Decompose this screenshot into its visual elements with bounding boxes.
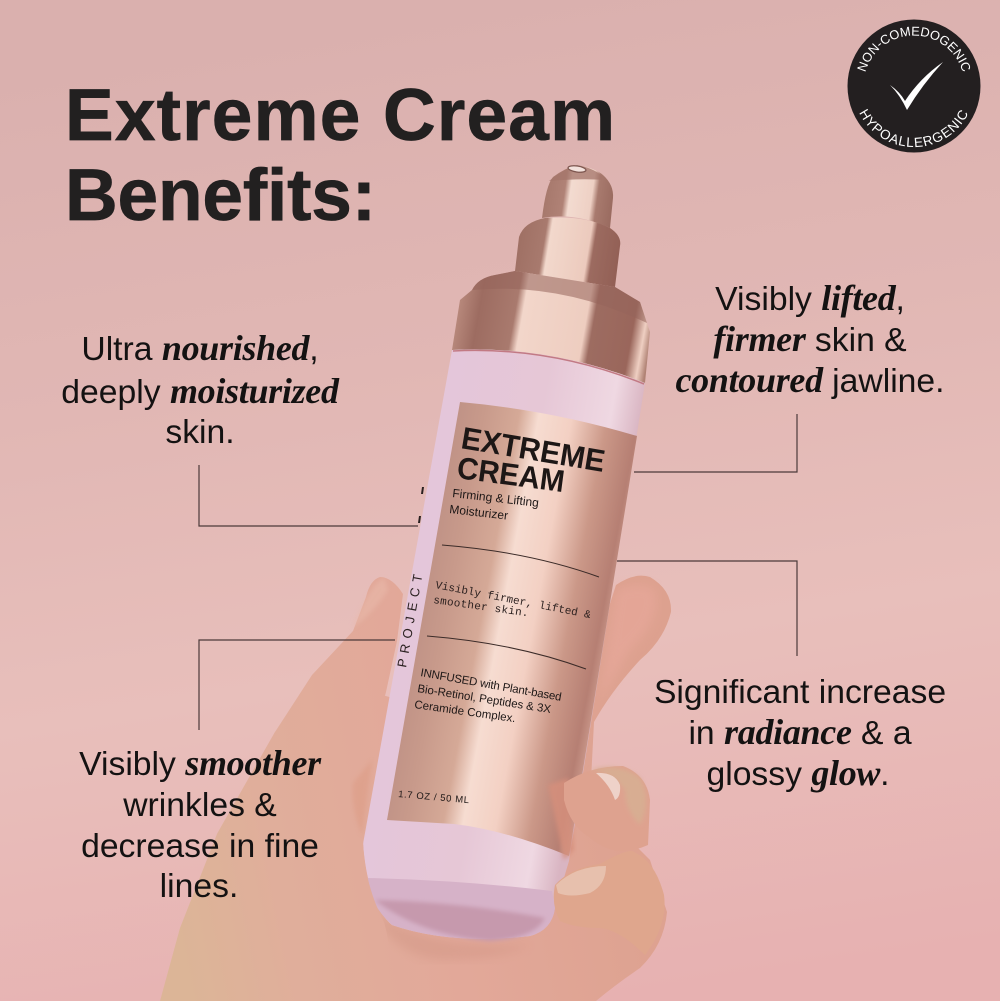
product descriptor <box>449 486 540 523</box>
bottle <box>363 165 650 941</box>
text: smoother benefit: wrinkles & <box>122 786 277 824</box>
text: radiance benefit: in radiance & a <box>688 712 912 752</box>
hidden brand letter marks <box>418 487 424 523</box>
collar <box>452 271 650 383</box>
nozzle hole <box>568 165 586 173</box>
pump neck <box>515 217 620 287</box>
hand behind bottle: palm and index finger <box>160 576 671 1001</box>
title: Extreme Cream <box>65 75 615 156</box>
text: radiance benefit <box>654 673 946 793</box>
label volume: 1.7 OZ / 50 ML <box>398 789 469 806</box>
skin reflection on bottle <box>548 778 574 860</box>
icon: check mark <box>890 62 943 110</box>
text: lifted benefit: Visibly lifted, <box>715 278 905 318</box>
base cap lower band <box>366 878 555 939</box>
ring finger <box>554 851 665 955</box>
side lettering: PROJECT <box>394 568 426 669</box>
thumb and front fingers <box>217 577 665 1001</box>
text: lifted benefit: firmer skin & <box>713 319 907 359</box>
product name: CREAM <box>455 450 567 499</box>
label ingredients: INNFUSED with Plant-based <box>419 667 562 704</box>
text: radiance benefit: Significant increase <box>654 673 946 711</box>
body <box>363 349 645 939</box>
callout line: radiance <box>617 561 797 656</box>
red rim line <box>453 350 644 384</box>
label ingredients <box>414 667 562 725</box>
badge: non-comedogenic hypoallergenic <box>848 20 980 152</box>
title: Benefits: <box>65 155 376 236</box>
callout line: lifted <box>634 414 797 472</box>
text: lifted benefit <box>675 278 945 400</box>
thumb nail <box>352 578 388 628</box>
middle finger tip tan <box>590 767 646 825</box>
callout line: nourished <box>199 465 418 526</box>
badge: non-comedogenic hypoallergenic: NON-COMEDOGENIC <box>857 26 970 72</box>
text: nourished benefit <box>61 328 340 451</box>
text: lifted benefit: contoured jawline. <box>675 360 945 400</box>
label claim: smoother skin. <box>432 595 529 620</box>
label ingredients: Ceramide Complex. <box>414 699 516 725</box>
text: smoother benefit: Visibly smoother <box>79 743 322 783</box>
base recess <box>375 900 545 941</box>
collar shoulder <box>472 271 647 323</box>
thumb <box>217 577 403 1001</box>
text: nourished benefit: skin. <box>165 413 235 451</box>
product descriptor: Moisturizer <box>449 502 509 523</box>
nozzle dome shading <box>549 165 607 181</box>
middle finger <box>564 766 650 851</box>
text: nourished benefit: deeply moisturized <box>61 371 340 411</box>
title <box>65 75 615 236</box>
text: radiance benefit: glossy glow. <box>706 753 890 793</box>
label ingredients: Bio-Retinol, Peptides & 3X <box>417 683 552 716</box>
label claim: Visibly firmer, lifted & <box>434 580 592 622</box>
product descriptor: Firming & Lifting <box>452 486 540 510</box>
label divider lines <box>427 545 599 669</box>
text: smoother benefit: lines. <box>160 867 238 905</box>
text: nourished benefit: Ultra nourished, <box>81 328 319 368</box>
palm web reflection <box>352 760 372 835</box>
pump nozzle <box>542 165 613 228</box>
badge: non-comedogenic hypoallergenic: HYPOALLERGENIC <box>860 108 968 148</box>
callout line: smoother <box>199 640 395 730</box>
ring fingernail <box>556 866 606 896</box>
product name: EXTREME <box>459 420 608 479</box>
text: smoother benefit: decrease in fine <box>81 827 319 865</box>
text: smoother benefit <box>79 743 322 905</box>
metal label <box>387 402 637 856</box>
middle fingernail <box>596 773 620 800</box>
